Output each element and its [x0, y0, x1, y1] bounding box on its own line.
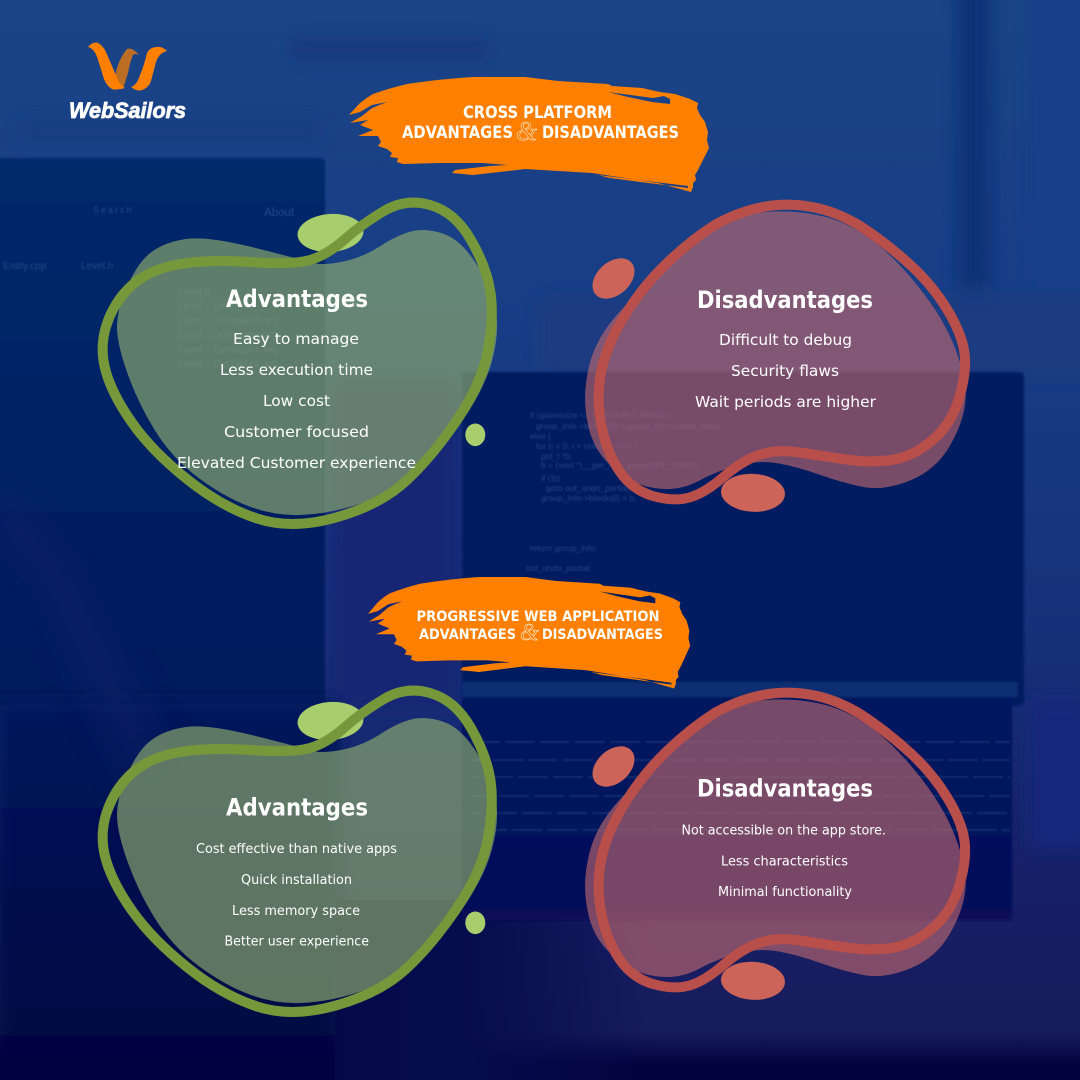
background: faint window text: group_info->blocks[i] = b;	[541, 493, 636, 503]
title line 2	[402, 116, 679, 146]
title line 2: &	[516, 116, 537, 146]
background: faint window text: else {	[530, 431, 551, 441]
brush stroke	[349, 77, 709, 192]
list: Low cost	[263, 392, 330, 410]
blob outline	[599, 693, 965, 987]
list: Less characteristics	[721, 854, 848, 870]
banner: cross platform title	[349, 77, 709, 192]
background: faint window text: goto out_undo_partial;	[546, 483, 631, 493]
panel: progressive web application disadvantages	[585, 693, 966, 1001]
panel: progressive web application advantages	[103, 691, 497, 1012]
background: faint window text: Level :: Level()	[178, 301, 244, 312]
banner: progressive web application title	[368, 577, 690, 689]
list: Minimal functionality	[718, 885, 852, 900]
background: faint window text: group_info->blocks[0] = group_info->small_block;	[536, 421, 722, 431]
list: Quick installation	[241, 873, 352, 888]
background: faint window text: Level :: OnRender(int)	[178, 330, 276, 341]
icon: sail mark	[88, 42, 167, 91]
blob outline	[599, 205, 965, 499]
background: faint window text	[3, 205, 722, 573]
list: Difficult to debug	[719, 331, 852, 349]
list: Less memory space	[232, 904, 360, 919]
list: Not accessible on the app store.	[682, 824, 886, 838]
list	[695, 331, 877, 411]
background: faint window text: if (!b)	[541, 473, 561, 483]
list: Elevated Customer experience	[177, 454, 416, 472]
title line 2	[419, 620, 663, 646]
accent dot: green	[465, 424, 485, 446]
list: Less execution time	[220, 361, 373, 379]
background: faint window text: Level :: GetTile(int, int)	[178, 345, 278, 356]
blob fill	[585, 211, 966, 489]
blob fill	[117, 230, 497, 515]
blob outline	[103, 691, 492, 1012]
title line 2: &	[520, 620, 539, 646]
background: faint window text: Search	[93, 205, 134, 215]
accent blob: red bottom	[720, 960, 786, 1001]
blob outline	[103, 203, 492, 524]
title line 2: ADVANTAGES	[419, 627, 516, 643]
panel: cross platform disadvantages	[585, 205, 966, 513]
background: faint window text: Level :: OnLoad(char*)	[178, 316, 279, 327]
title line 2: DISADVANTAGES	[542, 123, 679, 142]
background: faint window text: return group_info;	[530, 543, 597, 553]
list: Security flaws	[731, 362, 839, 380]
blob fill	[117, 718, 497, 1003]
accent blob: red left	[585, 250, 642, 307]
heading: Disadvantages	[697, 774, 873, 802]
list: Better user experience	[224, 934, 369, 950]
background: faint window text: Entity.cpp	[3, 261, 47, 272]
list: Easy to manage	[233, 330, 359, 348]
background: faint window text: About	[264, 207, 295, 219]
list	[177, 330, 416, 472]
accent blob: green top	[296, 212, 365, 254]
background: faint window text: if (gidsetsize <= NGROUPS_SMALL)	[530, 410, 670, 420]
list: Customer focused	[224, 423, 369, 441]
background: faint window text: b = (void *)__get_free_page(GFP_USER);	[541, 460, 700, 470]
wordmark: WebSailors	[69, 98, 186, 123]
title line 1: PROGRESSIVE WEB APPLICATION	[416, 609, 660, 625]
heading: Disadvantages	[697, 286, 873, 314]
accent blob: red bottom	[720, 472, 786, 513]
panel: cross platform advantages	[103, 203, 497, 524]
blob fill	[585, 699, 966, 977]
background: faint window text: for (i = 0; i < nblocks; i++) {	[536, 441, 637, 451]
list: Cost effective than native apps	[196, 842, 397, 857]
accent blob: green top	[296, 700, 365, 742]
list	[196, 842, 397, 950]
accent dot: green	[465, 912, 485, 934]
brush stroke	[368, 577, 690, 689]
accent blob: red left	[585, 738, 642, 795]
background: faint window text: Level :: GetTile(int, int)	[178, 359, 278, 370]
background: blurred keyboard rows	[470, 742, 1010, 830]
heading: Advantages	[226, 794, 368, 822]
list: Wait periods are higher	[695, 393, 877, 411]
background: faint window text: Level.h	[178, 287, 210, 298]
background: faint window text: gid_t *b;	[541, 451, 572, 461]
background: faint window text: out_undo_partial:	[526, 563, 592, 573]
logo: WebSailors	[69, 42, 186, 123]
background: faint window text: Level.h	[81, 261, 113, 272]
title line 2: ADVANTAGES	[402, 123, 513, 142]
heading: Advantages	[226, 285, 368, 313]
title line 1: CROSS PLATFORM	[463, 103, 612, 122]
list	[682, 824, 886, 900]
title line 2: DISADVANTAGES	[542, 627, 663, 643]
